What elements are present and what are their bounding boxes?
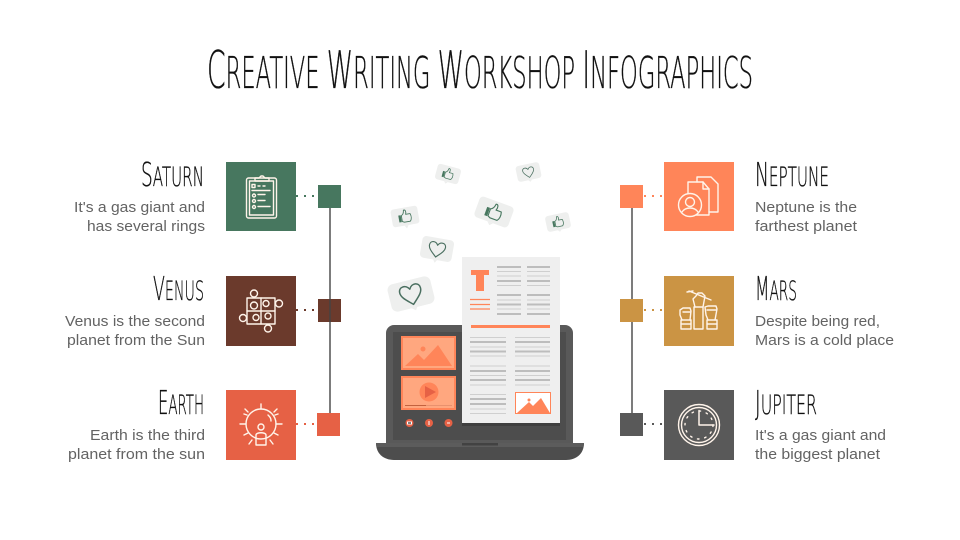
illustration: laptop with document: [376, 257, 584, 460]
laptop base: [376, 443, 584, 460]
icon: raised hands: [664, 276, 734, 346]
bubble: heart: [386, 275, 436, 316]
document page: [462, 257, 560, 423]
text: Mars description: [755, 313, 894, 349]
text: Neptune description: [755, 199, 858, 235]
panel: Earth: [68, 383, 340, 463]
text: Saturn description: [74, 199, 205, 235]
icon: documents with person: [664, 162, 734, 231]
text: Earth description: [68, 427, 205, 463]
heading: Jupiter: JUPITER: [755, 383, 817, 422]
marker square: [620, 413, 643, 436]
marker square: [620, 185, 643, 208]
icon: clipboard checklist: [226, 162, 296, 231]
document image: [516, 392, 550, 414]
text: Earth description: Earth is the third: [90, 427, 205, 444]
heading: Earth: EARTH: [158, 383, 204, 422]
heading: Saturn: SATURN: [141, 155, 204, 194]
panel: Saturn: [74, 155, 341, 235]
screen panel: video: [401, 376, 456, 410]
laptop body: [386, 325, 573, 443]
screen panel: image: [401, 336, 456, 370]
text: Mars description: Mars is a cold place: [755, 332, 894, 349]
text: Saturn description: has several rings: [87, 218, 205, 235]
document heading T: [471, 270, 489, 291]
text: Mars description: Despite being red,: [755, 313, 880, 330]
connector dots: [644, 195, 662, 197]
document orange lines: [470, 300, 490, 309]
panel: Jupiter: [620, 383, 886, 463]
document text lines: [470, 267, 550, 414]
bubble: heart: [419, 235, 455, 266]
timeline line right: [631, 208, 633, 413]
marker square: [318, 299, 341, 322]
bubble: thumb: [434, 163, 462, 187]
text: Jupiter description: [755, 427, 886, 463]
panel: Mars: [620, 269, 894, 349]
text: Saturn description: It's a gas giant and: [74, 199, 205, 216]
connector dots: [644, 423, 662, 425]
heading: Mars: MARS: [755, 269, 797, 308]
heading: Venus: VENUS: [153, 269, 204, 308]
text: Venus description: Venus is the second: [65, 313, 205, 330]
bubble: thumb: [472, 196, 515, 231]
connector dots: [296, 309, 314, 311]
text: Venus description: [65, 313, 205, 349]
marker square: [318, 185, 341, 208]
connector dots: [296, 423, 314, 425]
laptop screen: [393, 332, 566, 440]
bubble: thumb: [390, 205, 420, 231]
heading: Neptune: NEPTUNE: [755, 155, 829, 194]
social icons: [406, 419, 452, 427]
icon: light bulb: [226, 390, 296, 460]
panel: Neptune: [620, 155, 858, 235]
connector dots: [296, 195, 314, 197]
connector dots: [644, 309, 662, 311]
bubble: heart: [515, 162, 542, 184]
illustration: reaction bubbles: [386, 162, 572, 316]
document rule: [471, 325, 550, 328]
marker square: [317, 413, 340, 436]
text: Venus description: planet from the Sun: [67, 332, 205, 349]
icon: puzzle: [226, 276, 296, 346]
timeline line left: [329, 208, 331, 413]
document shadow: [462, 423, 560, 426]
bubble: thumb: [545, 212, 572, 234]
text: Neptune description: Neptune is the: [755, 199, 857, 216]
text: Jupiter description: the biggest planet: [755, 446, 881, 463]
text: Jupiter description: It's a gas giant and: [755, 427, 886, 444]
marker square: [620, 299, 643, 322]
text: Neptune description: farthest planet: [755, 218, 858, 235]
title: CREATIVE WRITING WORKSHOP INFOGRAPHICS: [207, 41, 753, 101]
text: Earth description: planet from the sun: [68, 446, 205, 463]
panel: Venus: [65, 269, 341, 349]
icon: clock: [664, 390, 734, 460]
